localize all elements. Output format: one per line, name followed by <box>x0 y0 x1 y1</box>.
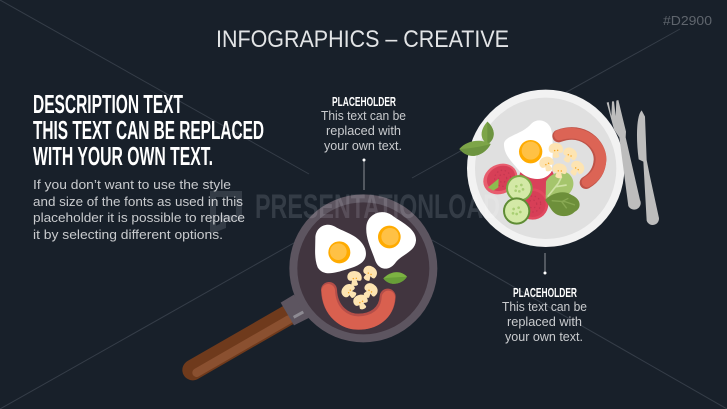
placeholder callout: plate <box>502 253 587 344</box>
watermark logo: PRESENTATIONLOAD <box>255 188 500 226</box>
description body text: and size of the fonts as used in this <box>33 194 244 209</box>
knife <box>637 110 659 225</box>
placeholder callout: plate: PLACEHOLDER <box>513 285 577 300</box>
plate <box>467 90 624 247</box>
description heading: DESCRIPTION TEXT <box>33 89 183 119</box>
hex code label: #D2900 <box>663 13 712 28</box>
mushrooms <box>339 264 380 312</box>
watermark logo <box>213 188 500 230</box>
placeholder callout: pan: replaced with <box>326 124 401 138</box>
lettuce <box>545 172 580 216</box>
description body text <box>33 177 245 242</box>
illustration: plate of food <box>459 90 659 247</box>
placeholder callout: plate: This text can be <box>502 300 587 314</box>
placeholder callout: pan <box>321 94 406 190</box>
placeholder callout: plate: replaced with <box>507 315 582 329</box>
description heading: WITH YOUR OWN TEXT. <box>33 141 213 171</box>
cucumber slices <box>503 175 533 225</box>
placeholder callout: pan: This text can be <box>321 109 406 123</box>
placeholder callout: plate: your own text. <box>505 330 583 344</box>
mushrooms <box>538 143 587 179</box>
placeholder callout: pan: PLACEHOLDER <box>332 94 396 109</box>
herb leaves <box>459 122 494 156</box>
tomato slices <box>478 158 555 220</box>
fried egg left <box>315 225 366 273</box>
description body text: If you don’t want to use the style <box>33 177 231 192</box>
pan handle <box>193 295 309 373</box>
description heading: THIS TEXT CAN BE REPLACED <box>33 115 264 145</box>
title: INFOGRAPHICS – CREATIVE <box>216 26 509 53</box>
fried egg right <box>366 212 416 269</box>
description body text: placeholder it is possible to replace <box>33 210 245 225</box>
description heading <box>33 89 264 171</box>
basil leaf <box>383 272 407 284</box>
fork <box>607 100 641 210</box>
description body text: it by selecting different options. <box>33 227 223 242</box>
sausage <box>559 133 601 183</box>
placeholder callout: pan: your own text. <box>324 139 402 153</box>
illustration: frying pan <box>193 194 437 373</box>
pan body <box>289 194 437 342</box>
fried egg <box>504 120 553 179</box>
sausage <box>328 290 388 323</box>
